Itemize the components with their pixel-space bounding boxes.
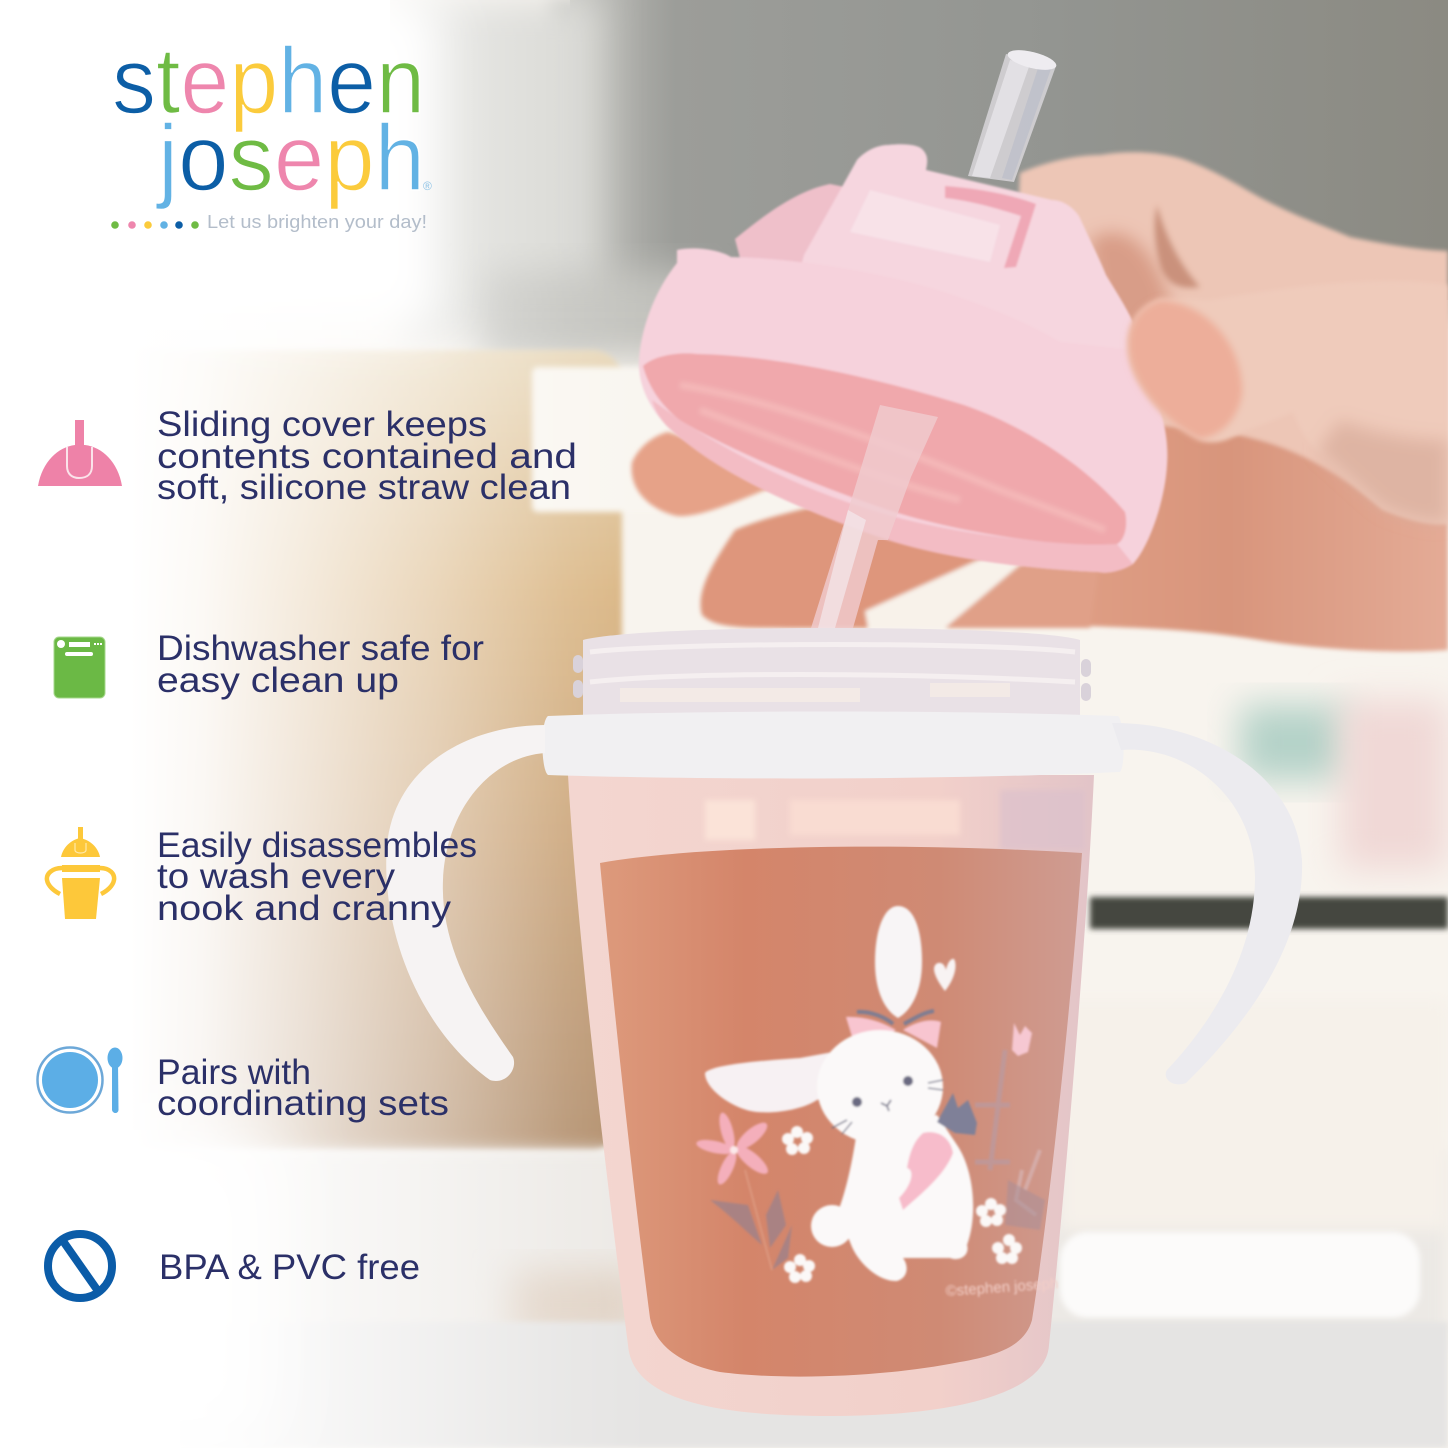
feature: sliding cover: Sliding cover keeps bbox=[157, 405, 487, 444]
bunny illustration bbox=[695, 906, 1059, 1300]
thumb body bbox=[1127, 281, 1448, 523]
sippy cup bbox=[386, 628, 1302, 1416]
juice bbox=[600, 847, 1082, 1377]
body bbox=[838, 1115, 973, 1281]
icon: prohibited symbol bbox=[48, 1234, 112, 1298]
bright reflections above juice bbox=[705, 790, 1085, 850]
finger two bbox=[701, 500, 1000, 628]
flower top right bbox=[1012, 1023, 1032, 1056]
cup body bbox=[568, 775, 1094, 1416]
thumb shadow bbox=[1317, 420, 1448, 523]
lid interior bbox=[643, 353, 1126, 545]
background gap between fingers bbox=[865, 556, 1022, 628]
back dome bbox=[735, 184, 860, 270]
feature: sliding cover: contents contained and bbox=[157, 437, 577, 476]
feature: disassembles: to wash every bbox=[157, 857, 396, 896]
slider block bbox=[850, 190, 1000, 262]
palm strip bbox=[900, 540, 1100, 628]
lid rim bbox=[639, 248, 1167, 573]
feature: sliding cover: soft, silicone straw clean bbox=[157, 468, 571, 507]
feature: disassembles: nook and cranny bbox=[157, 889, 452, 928]
threaded rim bbox=[583, 628, 1080, 716]
straw above the lid bbox=[968, 46, 1058, 182]
head bbox=[817, 1030, 943, 1144]
icon: dishwasher bbox=[54, 637, 105, 698]
tail bbox=[811, 1205, 853, 1247]
feature: coordinating sets bbox=[157, 1053, 449, 1123]
registered mark: ® bbox=[423, 179, 432, 193]
carrot leaves bbox=[937, 1093, 977, 1135]
icon: straw lid bbox=[38, 420, 122, 486]
carrot bbox=[899, 1132, 953, 1210]
icon: sippy cup bbox=[47, 827, 114, 919]
finger one bbox=[632, 432, 790, 516]
left handle bbox=[386, 725, 545, 1081]
feature: dishwasher safe: Dishwasher safe for bbox=[157, 629, 484, 668]
bow bbox=[846, 1011, 941, 1050]
floppy ear bbox=[705, 1052, 850, 1112]
back of hand bbox=[1000, 152, 1448, 640]
feature: disassembles: Easily disassembles bbox=[157, 826, 477, 865]
pink flower bbox=[695, 1111, 772, 1187]
thumb tip bbox=[1129, 300, 1242, 439]
lid lower edge bbox=[652, 400, 1133, 573]
under palm bbox=[960, 425, 1448, 652]
finger shading bbox=[1090, 232, 1170, 340]
cup copyright mark: ©stephen joseph bbox=[945, 1275, 1059, 1300]
right handle bbox=[1112, 723, 1302, 1084]
logo word: joseph: joseph bbox=[155, 105, 425, 210]
icon: plate and spoon bbox=[38, 1048, 122, 1113]
feature: dishwasher safe: easy clean up bbox=[157, 661, 399, 700]
feature: BPA and PVC free: BPA & PVC free bbox=[159, 1248, 420, 1287]
small plants bbox=[710, 1050, 1045, 1270]
logo word: stephen: stephen bbox=[112, 28, 425, 133]
heart bbox=[934, 959, 956, 991]
eyes, nose, whiskers bbox=[832, 1076, 943, 1134]
lid bbox=[639, 144, 1167, 573]
logo dots bbox=[111, 221, 199, 229]
thumb bbox=[1127, 281, 1448, 523]
finger crease bbox=[1155, 205, 1200, 288]
feature: coordinating sets: coordinating sets bbox=[157, 1084, 449, 1123]
feature: dishwasher safe bbox=[157, 629, 484, 700]
tagline: Let us brighten your day! bbox=[207, 212, 427, 232]
white blossoms bbox=[782, 1126, 1022, 1283]
hand: palm and lower fingers bbox=[632, 152, 1448, 652]
feature: coordinating sets: Pairs with bbox=[157, 1053, 311, 1092]
slider channel bbox=[945, 186, 1036, 268]
straw below the lid bbox=[811, 405, 938, 628]
feature: sliding cover bbox=[157, 405, 577, 507]
feature: disassembles bbox=[157, 826, 477, 928]
front dome bbox=[800, 144, 1135, 400]
logo bbox=[111, 28, 432, 232]
interior ribs bbox=[680, 385, 1105, 530]
collar bbox=[542, 712, 1124, 778]
upright ear bbox=[875, 906, 922, 1018]
